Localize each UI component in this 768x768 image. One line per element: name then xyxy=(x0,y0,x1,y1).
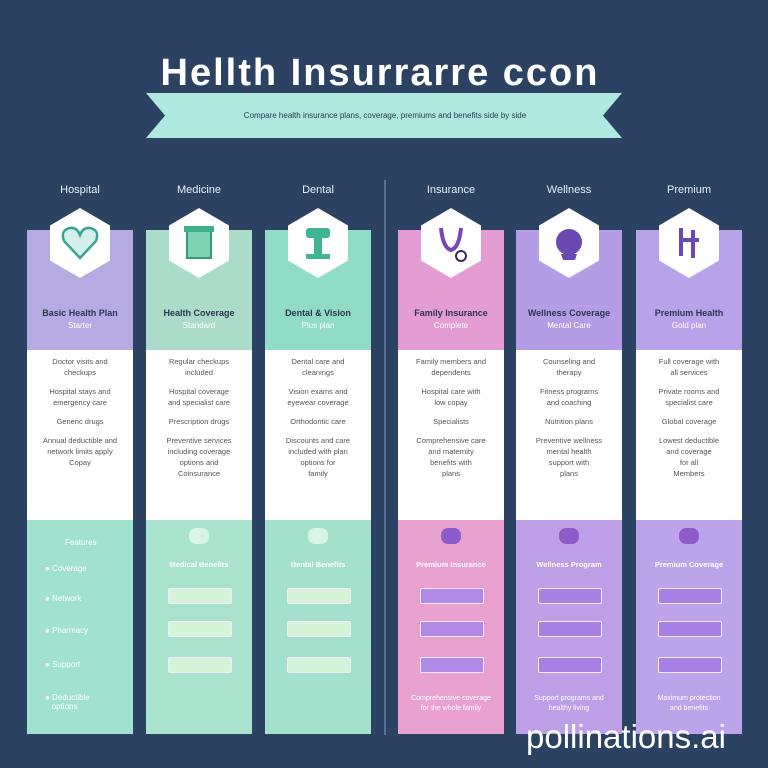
panel: plan 4 xyxy=(398,208,504,734)
panel: plan 4: Premium Insurance xyxy=(416,560,486,569)
panel: plan 3: Orthodontic care xyxy=(290,417,346,426)
panel: plan 2: Hospital coverage xyxy=(169,387,229,396)
panel: plan 2: included xyxy=(185,368,213,377)
text: Insurance xyxy=(427,184,475,196)
text: Premium xyxy=(667,184,711,196)
panel: plan 3: eyewear coverage xyxy=(287,398,349,407)
panel: plan 3: Discounts and care xyxy=(286,436,350,445)
features list: ● Support xyxy=(45,660,80,669)
features list: ● Network xyxy=(45,594,81,603)
panel: plan 1: Generic drugs xyxy=(56,417,104,426)
panel: plan 1: emergency care xyxy=(53,398,107,407)
panel: plan 2: and specialist care xyxy=(168,398,230,407)
panel: plan 6: specialist care xyxy=(665,398,713,407)
ribbon banner xyxy=(146,93,622,138)
panel: plan 3: options for xyxy=(300,458,336,467)
panel: plan 1: network limits apply xyxy=(47,447,113,456)
features list: ● Coverage xyxy=(45,564,87,573)
panel: plan 3: Dental Benefits xyxy=(291,560,345,569)
panel: plan 6: Premium Health xyxy=(655,308,723,318)
panel: plan 3: included with plan xyxy=(288,447,348,456)
panel: plan 3: Dental & Vision xyxy=(285,308,351,318)
panel: plan 4: low copay xyxy=(434,398,468,407)
panel: plan 4: benefits with xyxy=(430,458,472,467)
features list: Features xyxy=(65,538,97,547)
panel: plan 4: Specialists xyxy=(433,417,469,426)
panel: plan 5: Support programs and xyxy=(534,695,604,702)
panel: plan 5: support with xyxy=(549,458,589,467)
panel: plan 3: cleanings xyxy=(302,368,334,377)
icon: heart xyxy=(50,208,110,278)
panel: plan 4: plans xyxy=(442,469,460,478)
features list xyxy=(45,538,97,711)
panel: plan 2: options and xyxy=(180,458,218,467)
title: Hellth Insurrarre ccon xyxy=(161,52,599,94)
panel: plan 3: family xyxy=(308,469,328,478)
text: Dental xyxy=(302,184,334,196)
panel: plan 2: Regular checkups xyxy=(169,357,229,366)
panel: plan 1 xyxy=(27,208,133,734)
panel: plan 2: Preventive services xyxy=(166,436,232,445)
panel: plan 2: including coverage xyxy=(168,447,230,456)
panel: plan 5: Wellness Program xyxy=(536,560,602,569)
icon: cross xyxy=(659,208,719,278)
panel: plan 4: Complete xyxy=(434,321,468,330)
panel: plan 5: plans xyxy=(560,469,578,478)
panel: plan 5: therapy xyxy=(556,368,582,377)
panel: plan 6: Global coverage xyxy=(662,417,716,426)
watermark: pollinations.ai xyxy=(526,718,726,755)
divider xyxy=(384,180,386,735)
panel: plan 5: Counseling and xyxy=(543,357,595,366)
panel: plan 4: Family members and xyxy=(416,357,486,366)
panel: plan 5: mental health xyxy=(546,447,592,456)
panel: plan 2: Prescription drugs xyxy=(169,417,229,426)
panel: plan 3 xyxy=(265,208,371,734)
panel: plan 4: and maternity xyxy=(428,447,474,456)
panel: plan 3: Dental care and xyxy=(292,357,344,366)
panel: plan 6: Private rooms and xyxy=(659,387,719,396)
panel: plan 1: Hospital stays and xyxy=(49,387,111,396)
panel: plan 6: Gold plan xyxy=(672,321,706,330)
panel: plan 5: Preventive wellness xyxy=(536,436,602,445)
panel: plan 4: Comprehensive coverage xyxy=(411,695,491,702)
panel: plan 1: Doctor visits and xyxy=(52,357,108,366)
features list: ● Pharmacy xyxy=(45,626,88,635)
icon: stethoscope xyxy=(421,208,481,278)
panel: plan 4: dependents xyxy=(431,368,471,377)
panel: plan 6: Members xyxy=(673,469,705,478)
panel: plan 4: Hospital care with xyxy=(421,387,481,396)
panel: plan 6: all services xyxy=(670,368,708,377)
panel: plan 2: Standard xyxy=(183,321,215,330)
panel: plan 5 xyxy=(516,208,622,734)
panel: plan 6: Full coverage with xyxy=(659,357,719,366)
panel: plan 6: Premium Coverage xyxy=(655,560,723,569)
panel: plan 2: Medical Benefits xyxy=(169,560,229,569)
panel: plan 4: Family Insurance xyxy=(414,308,488,318)
panel: plan 6 xyxy=(636,208,742,734)
panel: plan 1: Annual deductible and xyxy=(43,436,117,445)
features list: ● Deductible xyxy=(45,693,90,702)
panel: plan 3: Vision exams and xyxy=(288,387,348,396)
text: Medicine xyxy=(177,184,221,196)
panel: plan 6: and coverage xyxy=(666,447,712,456)
panel: plan 6: Lowest deductible xyxy=(659,436,719,445)
panel: plan 3: Plus plan xyxy=(302,321,334,330)
panel: plan 2 xyxy=(146,208,252,734)
panel: plan 5: healthy living xyxy=(549,705,589,712)
panel: plan 2: Health Coverage xyxy=(163,308,235,318)
features list: options xyxy=(52,702,77,711)
panel: plan 1: Basic Health Plan xyxy=(42,308,118,318)
panel: plan 1: checkups xyxy=(64,368,96,377)
panel: plan 1: Copay xyxy=(69,458,91,467)
panel: plan 6: and benefits xyxy=(670,705,708,712)
panel: plan 5: Nutrition plans xyxy=(545,417,593,426)
panel: plan 4: for the whole family xyxy=(421,705,481,712)
panel: plan 6: Maximum protection xyxy=(657,695,721,702)
panel: plan 5: Wellness Coverage xyxy=(528,308,610,318)
panel: plan 1: Starter xyxy=(68,321,92,330)
text: Wellness xyxy=(547,184,591,196)
icon: pillar xyxy=(288,208,348,278)
column labels: Hospital xyxy=(60,184,100,196)
icon: building xyxy=(169,208,229,278)
icon: head xyxy=(539,208,599,278)
panel: plan 5: Mental Care xyxy=(547,321,591,330)
panel: plan 2: Coinsurance xyxy=(178,469,220,478)
panel: plan 6: for all xyxy=(680,458,698,467)
panel: plan 4: Comprehensive care xyxy=(416,436,486,445)
panel: plan 5: Fitness programs xyxy=(540,387,598,396)
panel: plan 5: and coaching xyxy=(547,398,591,407)
ribbon subtitle: Compare health insurance plans, coverage, premiums and benefits side by side xyxy=(244,111,526,120)
